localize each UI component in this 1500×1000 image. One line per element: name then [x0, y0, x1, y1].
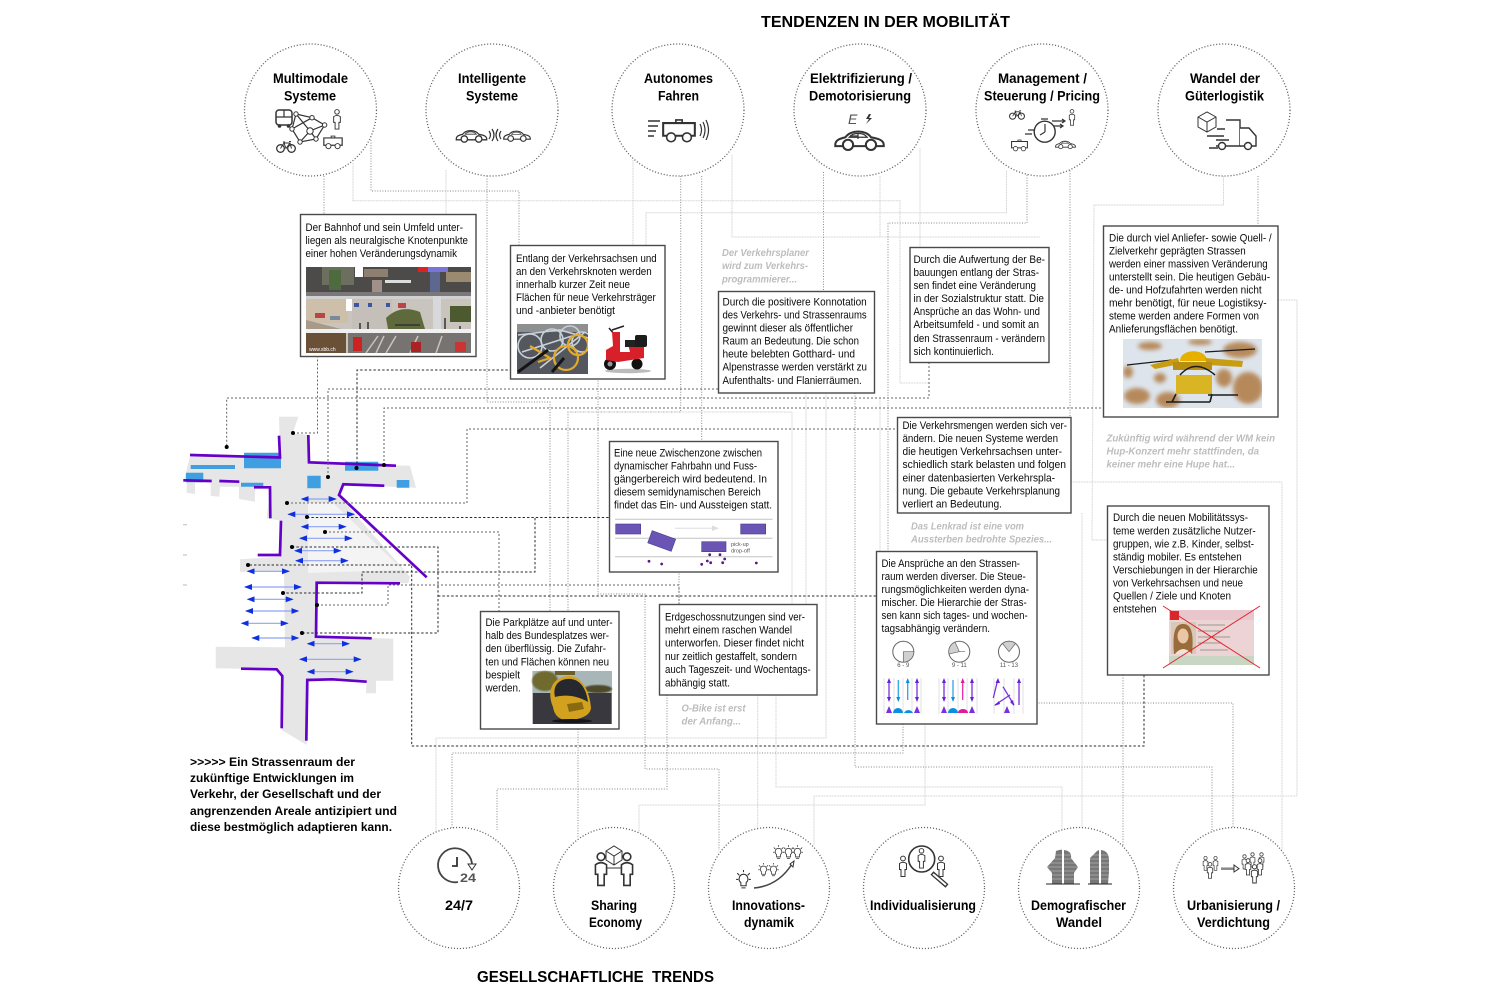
- text box: Mobilitätssysteme with crossed-out licence: [1108, 506, 1269, 675]
- icon: people group growing: [1203, 853, 1264, 883]
- text box: Zwischenzone with pick-up diagram: findet das Ein- und Aussteigen statt.: [614, 500, 772, 512]
- text box: Mobilitätssysteme with crossed-out licence: gruppen, wie z.B. Kinder, selbst-: [1113, 538, 1254, 550]
- circle: Wandel der Güterlogistik: Wandel der: [1190, 71, 1261, 86]
- text box: Konnotation des Strassenraums: [718, 292, 874, 393]
- text box: Erdgeschossnutzungen: [660, 604, 817, 695]
- diagram: time-of-day pies: 6 - 9: [897, 663, 910, 669]
- text box: Aufwertung der Bebauungen: Ansprüche an das Wohn- und: [914, 306, 1040, 318]
- conclusion text: [190, 755, 397, 834]
- text box: Anlieferung with drone image: Die durch viel Anliefer- sowie Quell- /: [1109, 232, 1272, 244]
- text box: Erdgeschossnutzungen: unterworfen. Dieser findet nicht: [665, 638, 804, 650]
- text box: Aufwertung der Bebauungen: [910, 248, 1049, 362]
- circle: Sharing Economy: [554, 828, 674, 948]
- circle: Autonomes Fahren: Fahren: [658, 88, 699, 104]
- icon: population pyramids: [1046, 850, 1112, 884]
- text box: Verkehrsmengen: [898, 418, 1071, 513]
- circle: Management / Steuerung / Pricing: [976, 44, 1108, 176]
- image: autonomous pod: [532, 671, 612, 724]
- image: red scooter: [604, 326, 651, 373]
- annotation: Verkehrsplaner: programmierer...: [721, 274, 797, 286]
- icon: clock 24: 24: [460, 871, 476, 885]
- circle: 24/7: [398, 828, 520, 948]
- circle: Elektrifizierung / Demotorisierung: Demotorisierung: [809, 88, 911, 104]
- annotation: Hup-Konzert: Hup-Konzert mehr stattfinden, da: [1106, 446, 1259, 458]
- circle: Intelligente Systeme: [426, 44, 558, 176]
- diagram: lane arrows by time: [884, 678, 1023, 714]
- text box: Verkehrsachsen with bike and scooter: innerhalb kurzer Zeit neue: [516, 279, 630, 291]
- annotation: Lenkrad: [910, 522, 1052, 546]
- text box: Konnotation des Strassenraums: Aufenthalts- und Flanierräumen.: [722, 375, 862, 387]
- text box: Mobilitätssysteme with crossed-out licence: teme werden zusätzliche Nutzer-: [1113, 526, 1256, 538]
- image: delivery drone: [1123, 339, 1263, 408]
- text box: Aufwertung der Bebauungen: sich kontinuierlich.: [914, 346, 994, 358]
- text box: Ansprüche an den Strassenraum with time diagrams: rungsmöglichkeiten werden dyna-: [882, 584, 1029, 596]
- annotation: Hup-Konzert: keiner mehr eine Hupe hat...: [1106, 460, 1235, 470]
- circle: Urbanisierung / Verdichtung: Urbanisierung /: [1187, 898, 1280, 913]
- text box: Parkplätze with pod vehicle: bespielt: [486, 670, 520, 682]
- text box: Konnotation des Strassenraums: Alpenstrasse werden verstärkt zu: [722, 362, 867, 374]
- text box: Verkehrsmengen: einer datenbasierten Verkehrspla-: [902, 472, 1055, 484]
- text box: Mobilitätssysteme with crossed-out licence: von Verkehrsachsen und neue: [1113, 578, 1243, 590]
- text box: Verkehrsmengen: verliert an Bedeutung.: [902, 498, 1002, 510]
- circle: Demografischer Wandel: Wandel: [1056, 915, 1102, 930]
- diagram: pick-up drop-off zone: [615, 519, 772, 566]
- annotation: Lenkrad: Das Lenkrad ist eine vom: [911, 522, 1024, 532]
- text box: Bahnhof with station image: [300, 214, 476, 356]
- circle: Innovationsdynamik: [708, 828, 830, 948]
- circle: Elektrifizierung / Demotorisierung: [794, 44, 926, 176]
- conclusion text: angrenzenden Areale antizipiert und: [190, 804, 397, 818]
- circle: Individualisierung: Individualisierung: [870, 898, 976, 913]
- text box: Mobilitätssysteme with crossed-out licence: Verschiebungen in der Hierarchie: [1113, 564, 1258, 576]
- text box: Ansprüche an den Strassenraum with time diagrams: sen kann sich tages- und wochen-: [882, 610, 1028, 622]
- text box: Anlieferung with drone image: unterstellt sein. Die heutigen Gebäu-: [1109, 272, 1270, 284]
- icon: delivery truck: [1198, 112, 1256, 150]
- text box: Anlieferung with drone image: mehr benötigt, für neue Logistiksy-: [1109, 298, 1267, 310]
- text box: Zwischenzone with pick-up diagram: gängerbereich wird bedeutend. In: [614, 474, 767, 486]
- text box: Mobilitätssysteme with crossed-out licence: Quellen / Ziele und Knoten: [1113, 590, 1231, 602]
- connector lines between trends, text boxes and map: [227, 140, 1297, 850]
- annotation: Verkehrsplaner: [721, 248, 810, 286]
- text box: Konnotation des Strassenraums: Raum an Bedeutung. Die schon: [722, 336, 859, 348]
- conclusion text: >>>>> Ein Strassenraum der: [190, 755, 355, 769]
- annotation: O-Bike: der Anfang...: [682, 716, 741, 728]
- image: station cross-section: www.sbb.ch: [309, 347, 336, 353]
- diagram: time-of-day pies: 11 - 13: [1000, 663, 1019, 669]
- circle: Wandel der Güterlogistik: Güterlogistik: [1185, 88, 1264, 104]
- text box: Anlieferung with drone image: de- und Hofzufahrten werden nicht: [1109, 284, 1262, 296]
- diagram: time-of-day pies: [893, 641, 1020, 669]
- annotation: O-Bike: [682, 704, 746, 728]
- circle: Innovationsdynamik: Innovations-: [732, 898, 805, 913]
- circle: Management / Steuerung / Pricing: Steuerung / Pricing: [984, 88, 1100, 104]
- text box: Parkplätze with pod vehicle: [480, 612, 619, 729]
- text box: Aufwertung der Bebauungen: sen findet eine Veränderung: [914, 280, 1036, 292]
- text box: Verkehrsachsen with bike and scooter: Flächen für neue Verkehrsträger: [516, 292, 656, 304]
- conclusion text: zukünftige Entwicklungen im: [190, 771, 354, 785]
- icon: autonomous vehicle: [648, 120, 708, 142]
- text box: Konnotation des Strassenraums: heute belebten Gotthard- und: [722, 348, 855, 360]
- conclusion text: Verkehr, der Gesellschaft und der: [190, 787, 381, 801]
- diagram: pick-up drop-off zone: pick-up: [731, 542, 749, 548]
- text box: Parkplätze with pod vehicle: den überflüssig. Die Zufahr-: [486, 643, 606, 655]
- text box: Verkehrsachsen with bike and scooter: an den Verkehrsknoten werden: [516, 266, 652, 278]
- circle: Urbanisierung / Verdichtung: [1174, 828, 1294, 948]
- text box: Bahnhof with station image: liegen als neuralgische Knotenpunkte: [306, 235, 468, 247]
- circle: Multimodale Systeme: [244, 44, 376, 176]
- circle: 24/7: 24/7: [445, 898, 473, 913]
- annotation: Hup-Konzert: Zukünftig wird während der WM kein: [1106, 434, 1275, 444]
- text box: Ansprüche an den Strassenraum with time diagrams: [876, 552, 1037, 724]
- text box: Parkplätze with pod vehicle: ten und Flächen können neu: [486, 656, 609, 668]
- text box: Konnotation des Strassenraums: des Verkehrs- und Strassenraums: [722, 310, 867, 322]
- circle: Wandel der Güterlogistik: [1158, 44, 1290, 176]
- icon: magnifier over people: [900, 846, 947, 886]
- annotation: Verkehrsplaner: wird zum Verkehrs-: [722, 261, 808, 272]
- text box: Ansprüche an den Strassenraum with time diagrams: tagsabhängig verändern.: [882, 623, 990, 635]
- text box: Verkehrsmengen: schiedlich stark belasten und folgen: [902, 459, 1066, 471]
- text box: Anlieferung with drone image: steme werden andere Formen von: [1109, 310, 1259, 322]
- text box: Erdgeschossnutzungen: auch Tageszeit- und Wochentags-: [665, 664, 811, 676]
- text box: Zwischenzone with pick-up diagram: dynamischer Fahrbahn und Fuss-: [614, 460, 757, 472]
- text box: Anlieferung with drone image: [1104, 226, 1278, 417]
- icon: electric car: E: [848, 111, 858, 127]
- text box: Mobilitätssysteme with crossed-out licence: entstehen: [1113, 604, 1157, 616]
- circle: Elektrifizierung / Demotorisierung: Elektrifizierung /: [810, 71, 912, 86]
- icon: light bulbs rising: [736, 845, 803, 888]
- text box: Verkehrsmengen: Die Verkehrsmengen werden sich ver-: [902, 420, 1067, 432]
- image: crossed-out driving licence: [1163, 606, 1260, 668]
- circle: Multimodale Systeme: Multimodale: [273, 71, 348, 86]
- diagram: time-of-day pies: 9 - 11: [952, 663, 967, 669]
- text box: Mobilitätssysteme with crossed-out licence: ständig mobiler. Es entstehen: [1113, 552, 1242, 564]
- text box: Verkehrsachsen with bike and scooter: [510, 246, 665, 379]
- text box: Erdgeschossnutzungen: mehrt einem raschen Wandel: [665, 624, 792, 636]
- map anchor dots: [225, 431, 386, 635]
- annotation: Lenkrad: Aussterben bedrohte Spezies...: [910, 534, 1052, 546]
- circle: Demografischer Wandel: [1018, 828, 1140, 948]
- text box: Konnotation des Strassenraums: gewinnt dieser als öffentlicher: [722, 322, 853, 334]
- text box: Ansprüche an den Strassenraum with time diagrams: raum werden diverser. Die Steue-: [882, 571, 1026, 583]
- text box: Verkehrsmengen: nung. Die gebaute Verkehrsplanung: [902, 486, 1060, 498]
- text box: Verkehrsachsen with bike and scooter: Entlang der Verkehrsachsen und: [516, 253, 657, 265]
- circle: Innovationsdynamik: dynamik: [744, 915, 794, 930]
- circle: Demografischer Wandel: Demografischer: [1031, 898, 1127, 913]
- text box: Parkplätze with pod vehicle: werden.: [485, 682, 521, 694]
- street map plan: [183, 417, 427, 745]
- circle: Multimodale Systeme: Systeme: [284, 88, 336, 104]
- text box: Bahnhof with station image: Der Bahnhof und sein Umfeld unter-: [306, 222, 463, 234]
- circle: Autonomes Fahren: [612, 44, 744, 176]
- text box: Zwischenzone with pick-up diagram: [610, 442, 778, 572]
- circle: Sharing Economy: Economy: [589, 915, 642, 930]
- text box: Aufwertung der Bebauungen: in der Sozialstruktur statt. Die: [914, 293, 1044, 305]
- text box: Aufwertung der Bebauungen: Arbeitsumfeld - und somit an: [914, 319, 1039, 331]
- text box: Parkplätze with pod vehicle: halb des Bundesplatzes wer-: [486, 630, 609, 642]
- text box: Anlieferung with drone image: Anlieferungsflächen benötigt.: [1109, 324, 1238, 336]
- image: shared bikes: [517, 324, 592, 374]
- text box: Aufwertung der Bebauungen: bauungen entlang der Stras-: [914, 267, 1039, 279]
- icon: transport network: [276, 110, 342, 152]
- text box: Ansprüche an den Strassenraum with time diagrams: Die Ansprüche an den Strassen-: [882, 558, 1020, 570]
- circle: Intelligente Systeme: Systeme: [466, 88, 518, 104]
- text box: Verkehrsmengen: die heutigen Verkehrsachsen unter-: [902, 446, 1062, 458]
- text box: Erdgeschossnutzungen: nur zeitlich gestaffelt, sondern: [665, 651, 797, 663]
- icon: stopwatch with vehicles: [1010, 109, 1075, 151]
- text box: Ansprüche an den Strassenraum with time diagrams: mischer. Die Hierarchie der Stras-: [882, 597, 1027, 609]
- circle: Individualisierung: [864, 828, 984, 948]
- annotation: Verkehrsplaner: Der Verkehrsplaner: [722, 248, 810, 259]
- icon: communicating cars: [456, 129, 530, 142]
- text box: Erdgeschossnutzungen: Erdgeschossnutzungen sind ver-: [665, 612, 805, 624]
- text box: Verkehrsachsen with bike and scooter: und -anbieter benötigt: [516, 305, 615, 317]
- text box: Mobilitätssysteme with crossed-out licence: Durch die neuen Mobilitätssys-: [1113, 512, 1248, 524]
- text box: Aufwertung der Bebauungen: Durch die Aufwertung der Be-: [914, 254, 1045, 266]
- icon: two people sharing a parcel: [595, 846, 633, 885]
- text box: Verkehrsmengen: ändern. Die neuen Systeme werden: [902, 433, 1058, 445]
- text box: Anlieferung with drone image: Zielverkehr geprägten Strassen: [1109, 246, 1246, 258]
- text box: Aufwertung der Bebauungen: den Strassenraum - verändern: [914, 333, 1045, 345]
- circle: Urbanisierung / Verdichtung: Verdichtung: [1197, 915, 1270, 930]
- conclusion text: diese bestmöglich adaptieren kann.: [190, 820, 392, 834]
- text box: Erdgeschossnutzungen: abhängig statt.: [665, 678, 730, 690]
- text box: Anlieferung with drone image: werden einer massiven Veränderung: [1108, 258, 1268, 270]
- image: station cross-section: [306, 267, 471, 353]
- text box: Zwischenzone with pick-up diagram: diesem semidynamischen Bereich: [614, 486, 761, 498]
- circle: Intelligente Systeme: Intelligente: [458, 71, 526, 86]
- circle: Sharing Economy: Sharing: [591, 898, 637, 913]
- text box: Parkplätze with pod vehicle: Die Parkplätze auf und unter-: [486, 617, 613, 629]
- annotation: O-Bike: O-Bike ist erst: [682, 704, 746, 714]
- text box: Konnotation des Strassenraums: Durch die positivere Konnotation: [722, 296, 867, 308]
- text box: Bahnhof with station image: einer hohen Veränderungsdynamik: [306, 248, 458, 260]
- title: Tendenzen in der Mobilität: TENDENZEN IN DER MOBILITÄT: [761, 14, 1011, 31]
- circle: Autonomes Fahren: Autonomes: [644, 71, 713, 86]
- text box: Zwischenzone with pick-up diagram: Eine neue Zwischenzone zwischen: [614, 448, 762, 460]
- circle: Management / Steuerung / Pricing: Management /: [998, 71, 1087, 86]
- diagram: pick-up drop-off zone: drop-off: [731, 548, 750, 554]
- title: Gesellschaftliche Trends: GESELLSCHAFTLICHE TRENDS: [477, 969, 714, 986]
- annotation: Hup-Konzert: [1106, 434, 1275, 470]
